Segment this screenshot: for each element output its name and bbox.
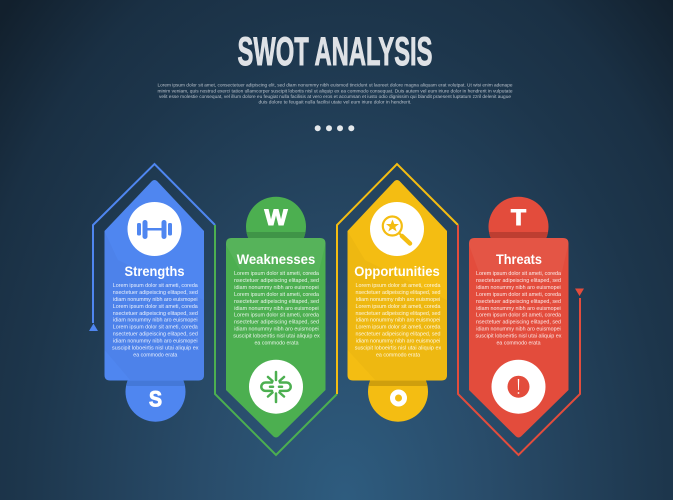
- body text: nsectetuer adipeiscing elitaped, sed: [113, 311, 198, 317]
- facet shading: [226, 238, 326, 275]
- panel: weaknesses: [226, 197, 326, 438]
- badge T: [488, 196, 548, 238]
- panel shape: [348, 180, 447, 380]
- body text: [112, 283, 199, 358]
- facet shading: [104, 231, 204, 380]
- badge O: [368, 380, 428, 422]
- body text: Lorem ipsum dolor sit ameti, coreda: [356, 304, 441, 310]
- body text: nsectetuer adipeiscing elitaped, sed: [113, 332, 198, 338]
- heading: Weaknesses: [237, 252, 315, 267]
- pagination dots: [315, 125, 354, 131]
- facet shading: [348, 231, 447, 380]
- body text: idiam nonummy nibh aro euismopei: [356, 339, 440, 345]
- panel: opportunities: [348, 180, 447, 422]
- icon: warning: [492, 360, 546, 414]
- panel: threats: [469, 197, 568, 438]
- intro paragraph: Lorem ipsum dolor sit amet, consectetuer adipiscing elit, sed diam nonummy nibh euismod tincidunt ut laoreet dolore magna aliquam erat volutpat. Ut wisi enim adenape: [158, 82, 513, 88]
- outline: green path: [215, 225, 337, 455]
- body text: idiam nonummy nibh aro euismopei: [476, 327, 561, 333]
- body text: idiam nonummy nibh aro euismopei: [476, 285, 561, 291]
- body text: [233, 271, 320, 346]
- body text: nsectetuer adipeiscing elitaped, sed: [356, 290, 440, 296]
- badge W: W: [264, 205, 288, 230]
- body text: suscipit loboeirtis nisl utai aliquip ex: [355, 346, 441, 352]
- body text: idiam nonummy nibh aro euismopei: [356, 297, 440, 303]
- intro paragraph: minim veniam, quis nostrud exerci tation ullamcorper suscipit lobortis nisl ut aliquip ex ea commodo consequat. Duis autem vel eum iriure dolor in hendrerit in vulputate: [158, 88, 513, 93]
- icon: broken link: [249, 360, 303, 414]
- body text: Lorem ipsum dolor sit ameti, coreda: [356, 283, 441, 289]
- badge W: [246, 196, 306, 238]
- body text: ea commodo erata: [496, 340, 541, 346]
- body text: suscipit loboeirtis nisl utai aliquip ex: [112, 346, 199, 352]
- body text: nsectetuer adipeiscing elitaped, sed: [234, 320, 319, 326]
- heading: Opportunities: [354, 264, 440, 279]
- body text: ea commodo erata: [133, 352, 178, 358]
- outline: yellow path: [337, 164, 458, 394]
- body text: nsectetuer adipeiscing elitaped, sed: [113, 290, 198, 296]
- arrowhead: blue: [89, 324, 98, 331]
- body text: nsectetuer adipeiscing elitaped, sed: [234, 278, 319, 284]
- body text: nsectetuer adipeiscing elitaped, sed: [356, 311, 440, 317]
- body text: nsectetuer adipeiscing elitaped, sed: [356, 332, 440, 338]
- body text: idiam nonummy nibh aro euismopei: [113, 318, 198, 324]
- intro paragraph: [158, 82, 513, 105]
- intro paragraph: velit esse molestie consequat, vel illum dolore eu feugiat nulla facilisis at vero eros et accumsan et iusto odio dignissim qui blandit praesent luptatum zzril delenit augue: [159, 94, 512, 99]
- body text: idiam nonummy nibh aro euismopei: [113, 339, 198, 345]
- body text: suscipit loboeirtis nisl utai aliquip ex: [476, 334, 562, 340]
- arrowhead: red: [575, 288, 584, 296]
- body text: nsectetuer adipeiscing elitaped, sed: [234, 299, 319, 305]
- badge T: T: [511, 205, 527, 230]
- panel shape: [469, 238, 568, 438]
- body text: idiam nonummy nibh aro euismopei: [234, 327, 319, 333]
- body text: [355, 283, 441, 358]
- panel shape: [104, 180, 204, 380]
- body text: Lorem ipsum dolor sit ameti, coreda: [113, 283, 199, 289]
- body text: nsectetuer adipeiscing elitaped, sed: [476, 320, 561, 326]
- body text: Lorem ipsum dolor sit ameti, coreda: [476, 292, 562, 298]
- body text: Lorem ipsum dolor sit ameti, coreda: [476, 271, 562, 277]
- outline: red arrow path: [458, 225, 584, 455]
- body text: nsectetuer adipeiscing elitaped, sed: [476, 299, 561, 305]
- body text: ea commodo erata: [376, 352, 421, 358]
- body text: idiam nonummy nibh aro euismopei: [476, 306, 561, 312]
- intro paragraph: duis dolore te feugait nulla facilisi utate vel eum iriure dolor in hendrerit.: [258, 100, 412, 105]
- body text: Lorem ipsum dolor sit ameti, coreda: [476, 313, 562, 319]
- body text: ea commodo erata: [254, 340, 299, 346]
- body text: Lorem ipsum dolor sit ameti, coreda: [113, 304, 199, 310]
- body text: idiam nonummy nibh aro euismopei: [113, 297, 198, 303]
- badge S: [126, 380, 186, 422]
- body text: Lorem ipsum dolor sit ameti, coreda: [234, 292, 320, 298]
- heading: Strengths: [124, 264, 184, 279]
- body text: Lorem ipsum dolor sit ameti, coreda: [234, 313, 320, 319]
- outline: blue arrow path: [89, 164, 215, 331]
- badge S: S: [149, 386, 162, 412]
- body text: [476, 271, 562, 346]
- body text: idiam nonummy nibh aro euismopei: [234, 285, 319, 291]
- panel: strengths: [104, 180, 204, 422]
- body text: Lorem ipsum dolor sit ameti, coreda: [113, 325, 199, 331]
- icon: dumbbell: [128, 202, 182, 256]
- panel shape: [226, 238, 326, 438]
- body text: idiam nonummy nibh aro euismopei: [234, 306, 319, 312]
- facet shading: [469, 238, 568, 280]
- body text: Lorem ipsum dolor sit ameti, coreda: [356, 325, 441, 331]
- body text: nsectetuer adipeiscing elitaped, sed: [476, 278, 561, 284]
- title: SWOT ANALYSIS: [238, 30, 432, 74]
- icon: magnifier: [370, 202, 424, 256]
- body text: suscipit loboeirtis nisl utai aliquip ex: [233, 334, 320, 340]
- body text: idiam nonummy nibh aro euismopei: [356, 318, 440, 324]
- body text: Lorem ipsum dolor sit ameti, coreda: [234, 271, 320, 277]
- heading: Threats: [496, 252, 542, 267]
